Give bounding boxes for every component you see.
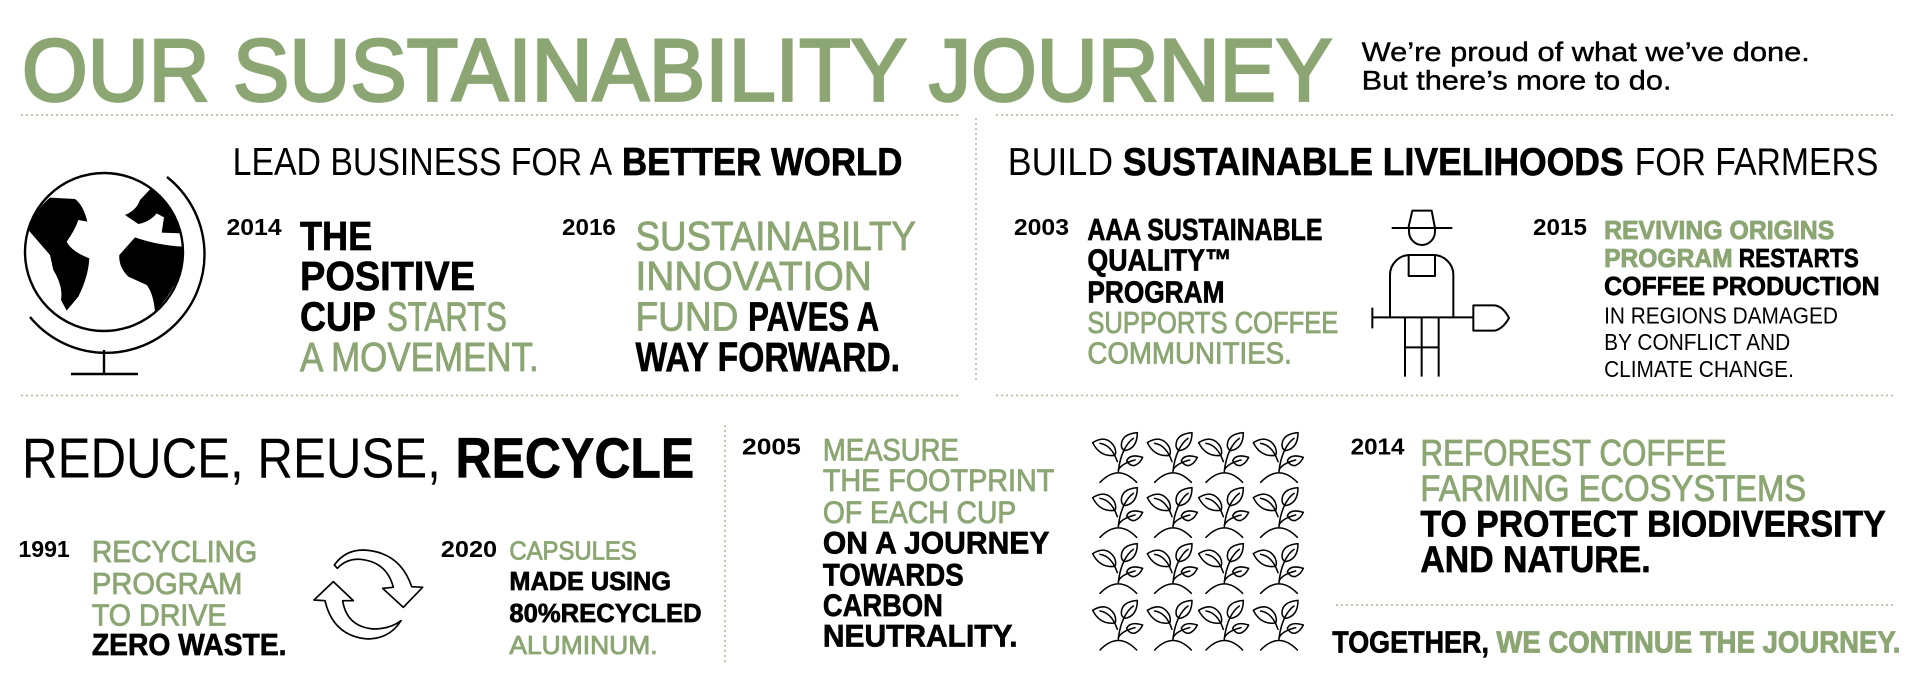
milestone: 2014 reforest: 2014: [1351, 433, 1405, 459]
milestone: 2014 positive cup: STARTS: [387, 294, 507, 340]
milestone: 2014 reforest: [1351, 432, 1886, 580]
milestone: 1991 recycling program: TO DRIVE: [92, 599, 227, 633]
milestone: 2003 AAA program: PROGRAM: [1087, 275, 1224, 309]
icon: farmer with shovel: [1372, 211, 1509, 377]
milestone: 2014 reforest: FARMING ECOSYSTEMS: [1420, 468, 1806, 509]
milestone: 2005 measure the footprint: 2005: [742, 433, 801, 459]
panel: lead business for a better world: [25, 141, 916, 380]
icon: recycling arrows: [314, 550, 423, 639]
heading: reduce reuse recycle: RECYCLE: [456, 427, 694, 490]
milestone: 1991 recycling program: 1991: [18, 536, 70, 562]
milestone: 2016 innovation fund: FUND: [636, 294, 738, 340]
milestone: 2005 measure the footprint: OF EACH CUP: [823, 495, 1016, 530]
heading: lead business: BETTER WORLD: [622, 141, 902, 184]
milestone: 2015 reviving origins: RESTARTS: [1739, 243, 1859, 273]
milestone: 1991 recycling program: PROGRAM: [92, 567, 242, 601]
milestone: 2005 measure the footprint: ON A JOURNEY: [823, 525, 1050, 560]
heading: reduce reuse recycle: REDUCE, REUSE,: [22, 427, 441, 490]
milestone: 2015 reviving origins: BY CONFLICT AND: [1604, 329, 1790, 355]
panel: sustainable livelihoods for farmers: [1008, 141, 1880, 382]
milestone: 2015 reviving origins: CLIMATE CHANGE.: [1604, 356, 1794, 382]
milestone: 2003 AAA program: SUPPORTS COFFEE: [1087, 306, 1338, 340]
milestone: 2003 AAA program: QUALITY™: [1087, 244, 1232, 278]
closing line: TOGETHER,: [1332, 626, 1489, 660]
heading: sustainable livelihoods: BUILD: [1008, 141, 1113, 184]
tagline: We’re proud of what we’ve done.: [1362, 37, 1810, 67]
milestone: 2016 innovation fund: SUSTAINABILTY: [636, 213, 916, 259]
milestone: 2003 AAA program: 2003: [1014, 214, 1069, 240]
milestone: 2005 measure the footprint: NEUTRALITY.: [823, 619, 1018, 654]
milestone: 2014 positive cup: A MOVEMENT.: [300, 334, 539, 380]
tagline: [1362, 37, 1810, 95]
icon: grid of seedlings: [1093, 433, 1303, 650]
milestone: 2016 innovation fund: PAVES A: [748, 294, 879, 340]
milestone: 2014 reforest: TO PROTECT BIODIVERSITY: [1420, 503, 1886, 544]
milestone: 2005 measure the footprint: TOWARDS: [823, 557, 964, 592]
milestone: 2014 positive cup: [227, 213, 539, 380]
milestone: 2014 positive cup: THE: [300, 213, 372, 259]
heading: sustainable livelihoods: SUSTAINABLE LIVELIHOODS: [1123, 141, 1624, 184]
milestone: 2020 capsules: 2020: [441, 536, 497, 562]
milestone: 2015 reviving origins: REVIVING ORIGINS: [1604, 215, 1834, 245]
milestone: 1991 recycling program: RECYCLING: [92, 535, 257, 569]
milestone: 2014 positive cup: 2014: [227, 214, 282, 240]
milestone: 2015 reviving origins: 2015: [1533, 214, 1587, 240]
milestone: 2015 reviving origins: [1533, 214, 1880, 382]
title: OUR SUSTAINABILITY JOURNEY: [22, 20, 1332, 119]
milestone: 2020 capsules: CAPSULES: [509, 538, 637, 566]
milestone: 2016 innovation fund: [562, 213, 916, 380]
milestone: 1991 recycling program: [18, 535, 287, 662]
heading: sustainable livelihoods: FOR FARMERS: [1635, 141, 1878, 184]
milestone: 2005 measure the footprint: MEASURE: [823, 432, 959, 467]
milestone: 2015 reviving origins: COFFEE PRODUCTION: [1604, 271, 1880, 301]
milestone: 2003 AAA program: [1014, 213, 1338, 371]
milestone: 2005 measure the footprint: THE FOOTPRINT: [823, 463, 1054, 498]
panel: reduce reuse recycle: [18, 427, 702, 662]
milestone: 2014 positive cup: CUP: [300, 294, 376, 340]
panel: carbon and nature: [742, 432, 1900, 660]
milestone: 2014 positive cup: POSITIVE: [300, 253, 475, 299]
milestone: 2005 measure the footprint: [742, 432, 1054, 654]
milestone: 2020 capsules: [441, 536, 702, 660]
milestone: 2016 innovation fund: 2016: [562, 214, 616, 240]
milestone: 2020 capsules: MADE USING: [509, 568, 671, 596]
milestone: 2014 reforest: AND NATURE.: [1420, 539, 1651, 580]
milestone: 2015 reviving origins: IN REGIONS DAMAGED: [1604, 302, 1838, 328]
heading: sustainable livelihoods: [1008, 141, 1878, 184]
milestone: 2014 reforest: REFOREST COFFEE: [1420, 432, 1727, 473]
milestone: 2016 innovation fund: WAY FORWARD.: [636, 334, 900, 380]
milestone: 2020 capsules: ALUMINUM.: [509, 632, 658, 660]
milestone: 2015 reviving origins: PROGRAM: [1604, 243, 1733, 273]
milestone: 2005 measure the footprint: CARBON: [823, 588, 943, 623]
heading: lead business: LEAD BUSINESS FOR A: [233, 141, 613, 184]
milestone: 2020 capsules: 80%RECYCLED: [509, 600, 702, 628]
milestone: 2003 AAA program: COMMUNITIES.: [1087, 337, 1292, 371]
closing line: [1332, 626, 1900, 660]
milestone: 1991 recycling program: ZERO WASTE.: [92, 628, 287, 662]
milestone: 2016 innovation fund: INNOVATION: [636, 253, 872, 299]
milestone: 2003 AAA program: AAA SUSTAINABLE: [1087, 213, 1322, 247]
heading: lead business: [233, 141, 902, 184]
tagline: But there’s more to do.: [1362, 65, 1671, 95]
icon: globe: [25, 173, 204, 374]
